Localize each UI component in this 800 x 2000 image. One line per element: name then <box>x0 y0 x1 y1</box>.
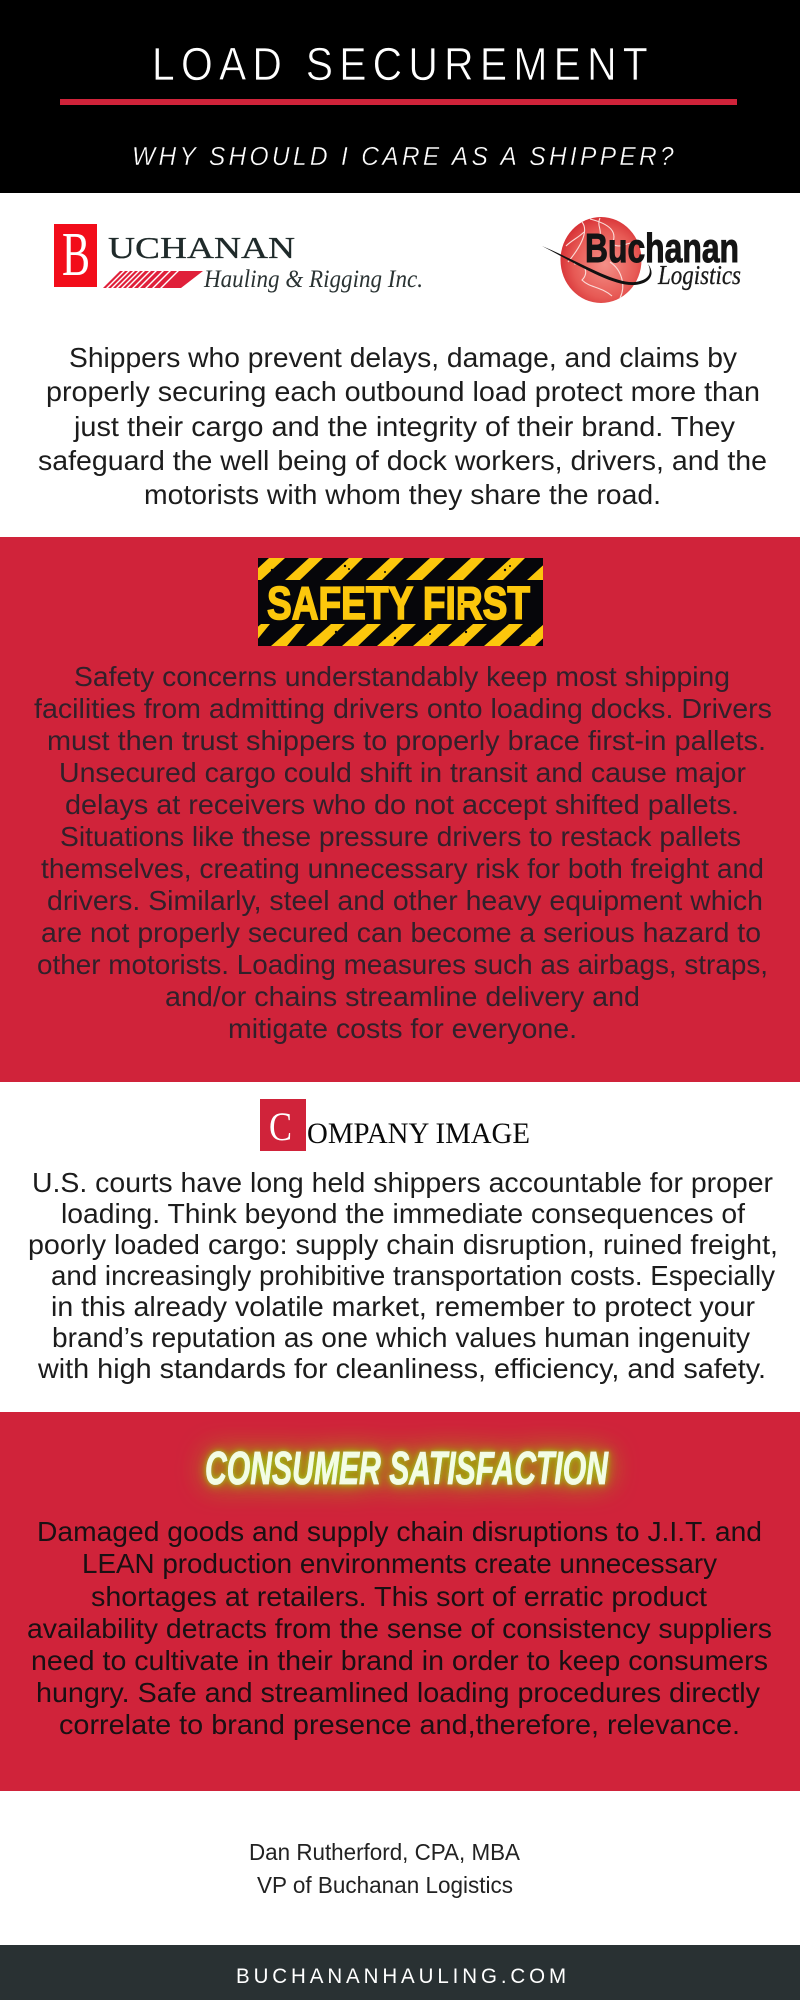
heading: company image <box>260 1099 530 1151</box>
text block: intro paragraph: properly securing each outbound load protect more than <box>46 376 760 407</box>
logo: Buchanan Logistics <box>542 217 741 303</box>
text block: company image paragraph: with high standards for cleanliness, efficiency, and safety. <box>37 1353 766 1384</box>
text block: intro paragraph: motorists with whom they share the road. <box>144 479 661 510</box>
title: LOAD SECUREMENT <box>152 38 654 90</box>
text block: company image paragraph: U.S. courts have long held shippers accountable for proper <box>32 1167 773 1198</box>
text block: consumer paragraph: Damaged goods and supply chain disruptions to J.I.T. and <box>37 1516 762 1547</box>
icon: safety first sign: SAFETY FIRST <box>267 577 530 629</box>
text block: company image paragraph <box>28 1167 778 1384</box>
text block: safety paragraph: and/or chains streamline delivery and <box>165 981 640 1012</box>
logo: Buchanan Logistics: Buchanan <box>585 225 739 271</box>
icon: safety first sign <box>258 558 543 646</box>
text block: safety paragraph: mitigate costs for everyone. <box>228 1013 577 1044</box>
text block: safety paragraph: other motorists. Loading measures such as airbags, straps, <box>37 949 768 980</box>
text block: safety paragraph: must then trust shippers to properly brace first-in pallets. <box>47 725 766 756</box>
text block: consumer paragraph: LEAN production environments create unnecessary <box>82 1548 717 1579</box>
text block: safety paragraph: Safety concerns understandably keep most shipping <box>74 661 730 692</box>
text block: safety paragraph: drivers. Similarly, steel and other heavy equipment which <box>47 885 763 916</box>
logo: Buchanan Logistics: Logistics <box>657 260 741 290</box>
text block: consumer paragraph: shortages at retailers. This sort of erratic product <box>91 1581 707 1612</box>
text block: company image paragraph: loading. Think beyond the immediate consequences of <box>61 1198 745 1229</box>
panel: safety first <box>0 537 800 1082</box>
text block: safety paragraph: Situations like these pressure drivers to restack pallets <box>60 821 741 852</box>
footer website link: BUCHANANHAULING.COM <box>236 1965 570 1988</box>
logo: Buchanan Hauling and Rigging: UCHANAN <box>108 230 295 265</box>
text block: safety paragraph: are not properly secured can become a serious hazard to <box>41 917 761 948</box>
text block: safety paragraph: Unsecured cargo could shift in transit and cause major <box>59 757 746 788</box>
red rule under title <box>60 99 737 105</box>
text block: safety paragraph <box>34 661 772 1044</box>
text block: intro paragraph: just their cargo and the integrity of their brand. They <box>73 411 735 442</box>
text block: consumer paragraph: correlate to brand presence and,therefore, relevance. <box>59 1709 740 1740</box>
text block: company image paragraph: poorly loaded cargo: supply chain disruption, ruined freight, <box>28 1229 778 1260</box>
logo: Buchanan Hauling and Rigging <box>54 221 423 293</box>
logo: Buchanan Hauling and Rigging: B <box>62 221 90 289</box>
logo: Buchanan Hauling and Rigging: Hauling & Rigging Inc. <box>203 266 423 293</box>
heading: company image: OMPANY IMAGE <box>307 1117 530 1150</box>
text block: safety paragraph: themselves, creating unnecessary risk for both freight and <box>41 853 764 884</box>
panel: footer <box>0 1945 800 2000</box>
text block: safety paragraph: facilities from admitting drivers onto loading docks. Drivers <box>34 693 772 724</box>
text block: intro paragraph: safeguard the well being of dock workers, drivers, and the <box>38 445 767 476</box>
text block: company image paragraph: and increasingly prohibitive transportation costs. Especially <box>51 1260 775 1291</box>
text block: author credit <box>249 1839 521 1898</box>
text block: author credit: Dan Rutherford, CPA, MBA <box>249 1839 521 1865</box>
text block: company image paragraph: brand’s reputation as one which values human ingenuity <box>52 1322 750 1353</box>
text block: consumer paragraph: hungry. Safe and streamlined loading procedures directly <box>36 1677 760 1708</box>
text block: intro paragraph: Shippers who prevent delays, damage, and claims by <box>69 342 737 373</box>
text block: consumer paragraph: availability detracts from the sense of consistency suppliers <box>27 1613 772 1644</box>
panel: header <box>0 0 800 193</box>
panel: company image <box>0 1082 800 1412</box>
text block: consumer paragraph: need to cultivate in their brand in order to keep consumers <box>31 1645 768 1676</box>
text block: company image paragraph: in this already volatile market, remember to protect your <box>51 1291 755 1322</box>
text block: intro paragraph <box>38 342 767 510</box>
text block: safety paragraph: delays at receivers who do not accept shifted pallets. <box>65 789 739 820</box>
heading: company image: C <box>269 1104 292 1149</box>
subtitle: WHY SHOULD I CARE AS A SHIPPER? <box>132 141 677 171</box>
text block: consumer paragraph <box>27 1516 772 1740</box>
panel: intro <box>0 193 800 537</box>
text block: author credit: VP of Buchanan Logistics <box>257 1872 513 1898</box>
panel: consumer satisfaction <box>0 1412 800 1791</box>
